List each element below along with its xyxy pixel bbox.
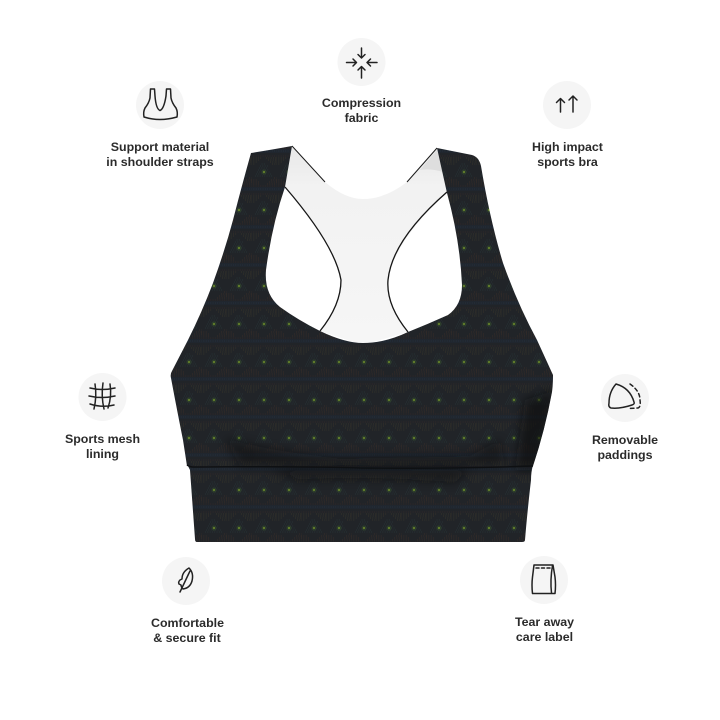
fabric fold shading — [225, 390, 556, 482]
label: & secure fit — [153, 631, 221, 645]
label: High impact — [532, 140, 603, 154]
label: Removable — [592, 433, 658, 447]
back panel — [285, 146, 447, 345]
label: paddings — [597, 448, 653, 462]
label: sports bra — [537, 155, 598, 169]
product: sports bra — [171, 146, 556, 542]
icon: padding shapes — [601, 374, 649, 422]
icon: care label pouch — [520, 556, 568, 604]
icon: up arrows — [543, 81, 591, 129]
label: care label — [516, 630, 573, 644]
waist seam — [187, 465, 533, 468]
icon: mesh net — [78, 373, 126, 421]
feature: comfortable fit — [151, 557, 224, 645]
feature: compression fabric — [322, 38, 401, 125]
feature: high impact — [532, 81, 603, 169]
label: fabric — [345, 111, 378, 125]
label: lining — [86, 447, 119, 461]
feature: removable paddings — [592, 374, 658, 462]
feature: tear away label — [515, 556, 574, 644]
label: Compression — [322, 96, 401, 110]
feature: mesh lining — [65, 373, 140, 461]
label: Sports mesh — [65, 432, 140, 446]
icon: compression arrows — [338, 38, 386, 86]
icon: bra outline — [136, 81, 184, 129]
infographic canvas — [65, 38, 658, 642]
feature: shoulder strap support — [106, 81, 214, 169]
lower band — [187, 464, 533, 542]
upper front panel — [171, 146, 553, 466]
label: in shoulder straps — [106, 155, 214, 169]
label: Tear away — [515, 615, 574, 629]
label: Comfortable — [151, 616, 224, 630]
label: Support material — [111, 140, 209, 154]
icon: feather — [162, 557, 210, 605]
